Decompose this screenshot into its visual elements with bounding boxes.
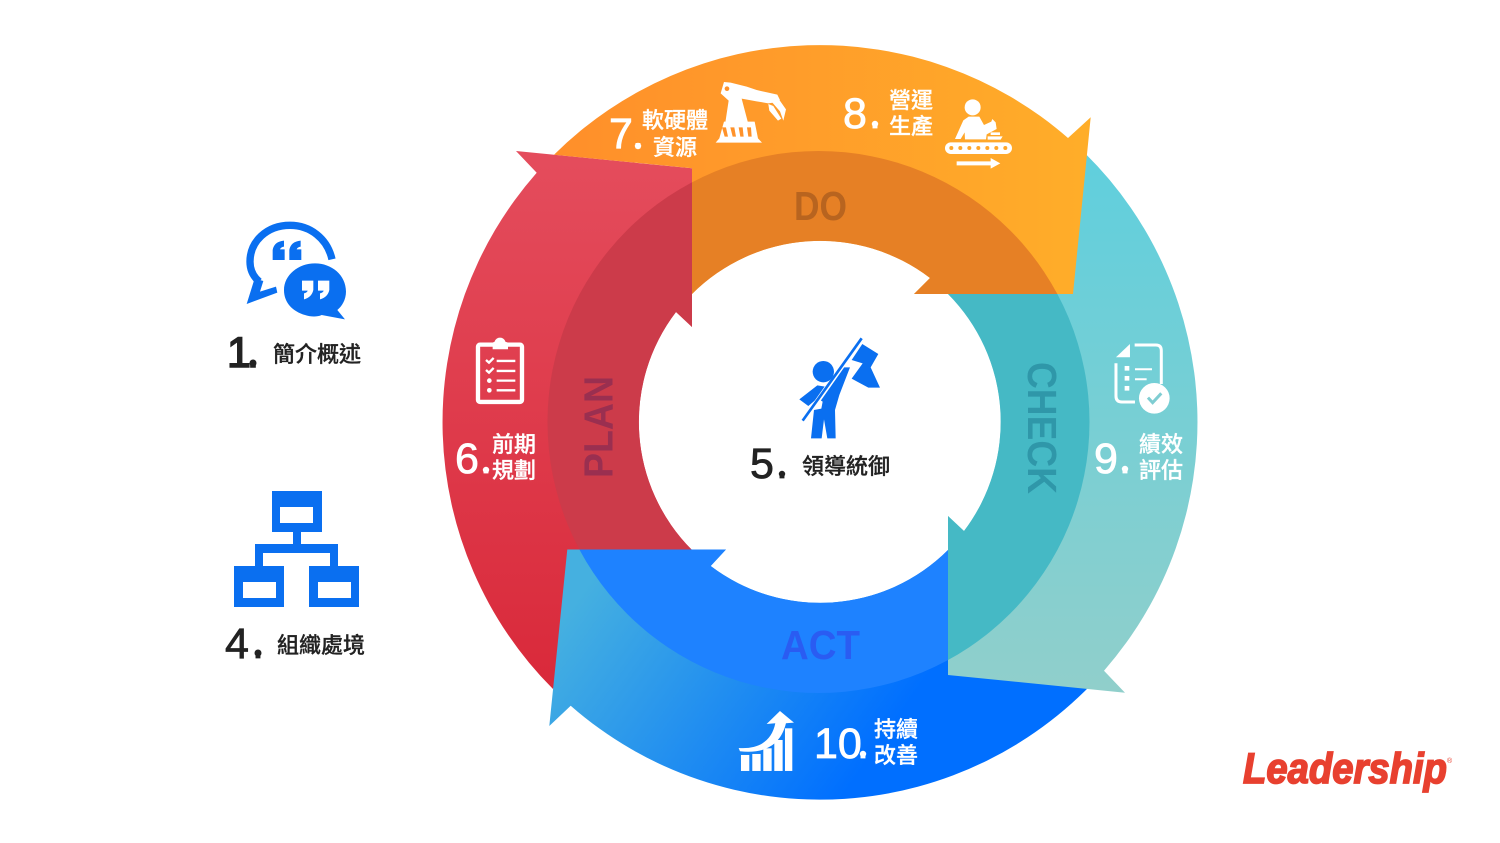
label: CHECK: CHECK [1019, 362, 1065, 494]
number 4: . [252, 620, 264, 668]
icon: org chart [234, 491, 359, 607]
label: PLAN: PLAN [576, 376, 622, 478]
arrow: PLAN red segment [443, 151, 692, 689]
number 7: 7 [609, 110, 633, 158]
icon: speech bubbles [247, 225, 346, 319]
arrow: DO orange segment [554, 45, 1091, 294]
item 6: pre-planning: 規劃 [492, 458, 536, 483]
number 9: . [1119, 435, 1131, 483]
number 5: 5 [750, 440, 774, 488]
icon: worker at conveyor [945, 99, 1012, 169]
text: 軟硬體 資源: 軟硬體 [642, 108, 708, 133]
item 7: hardware and software resources [609, 82, 786, 160]
number 6: . [480, 435, 492, 483]
text: 領導統御: 領導統御 [802, 454, 890, 479]
number 9: 9 [1094, 435, 1118, 483]
text: 持續 改善: 持續 [874, 717, 918, 742]
arrow: ACT blue segment [549, 550, 1104, 800]
number 1: 1 [227, 329, 251, 377]
label: ACT: ACT [781, 622, 860, 668]
arrow: CHECK teal segment [948, 153, 1197, 693]
number 1: . [247, 329, 259, 377]
item 10: continuous improvement [739, 711, 918, 771]
number 10: 10 [814, 720, 862, 768]
item 5: leadership, centre [750, 338, 890, 488]
icon: growth chart [739, 711, 794, 771]
number 4: 4 [225, 620, 249, 668]
item 10: continuous improvement: 改善 [874, 743, 918, 768]
logo: Leadership: Leadership [1243, 745, 1447, 793]
number 8: . [869, 90, 881, 138]
icon: robot arm [716, 82, 786, 143]
number 5: . [776, 440, 788, 488]
icon: document with check [1116, 344, 1170, 414]
item 8: operations and production: 生產 [889, 114, 933, 139]
logo: Leadership: ® [1447, 757, 1453, 765]
number 7: . [632, 110, 644, 158]
text: 前期 規劃: 前期 [492, 432, 536, 457]
item 4: organizational context [225, 491, 365, 668]
icon: figure raising flag [799, 338, 880, 438]
icon: clipboard checklist [478, 338, 522, 402]
text: 簡介概述: 簡介概述 [273, 342, 361, 367]
item 8: operations and production [843, 88, 1012, 169]
number 6: 6 [455, 435, 479, 483]
item 1: introduction [227, 225, 361, 377]
text: 績效 評估: 績效 [1139, 432, 1183, 457]
item 9: performance evaluation: 評估 [1139, 458, 1183, 483]
number 10: . [857, 720, 869, 768]
number 8: 8 [843, 90, 867, 138]
item 6: pre-planning [455, 338, 536, 483]
text: 組織處境: 組織處境 [277, 633, 365, 658]
item 9: performance evaluation [1094, 344, 1183, 483]
label: DO: DO [794, 183, 847, 229]
text: 營運 生產: 營運 [889, 88, 933, 113]
item 7: hardware and software resources: 資源 [653, 135, 697, 160]
